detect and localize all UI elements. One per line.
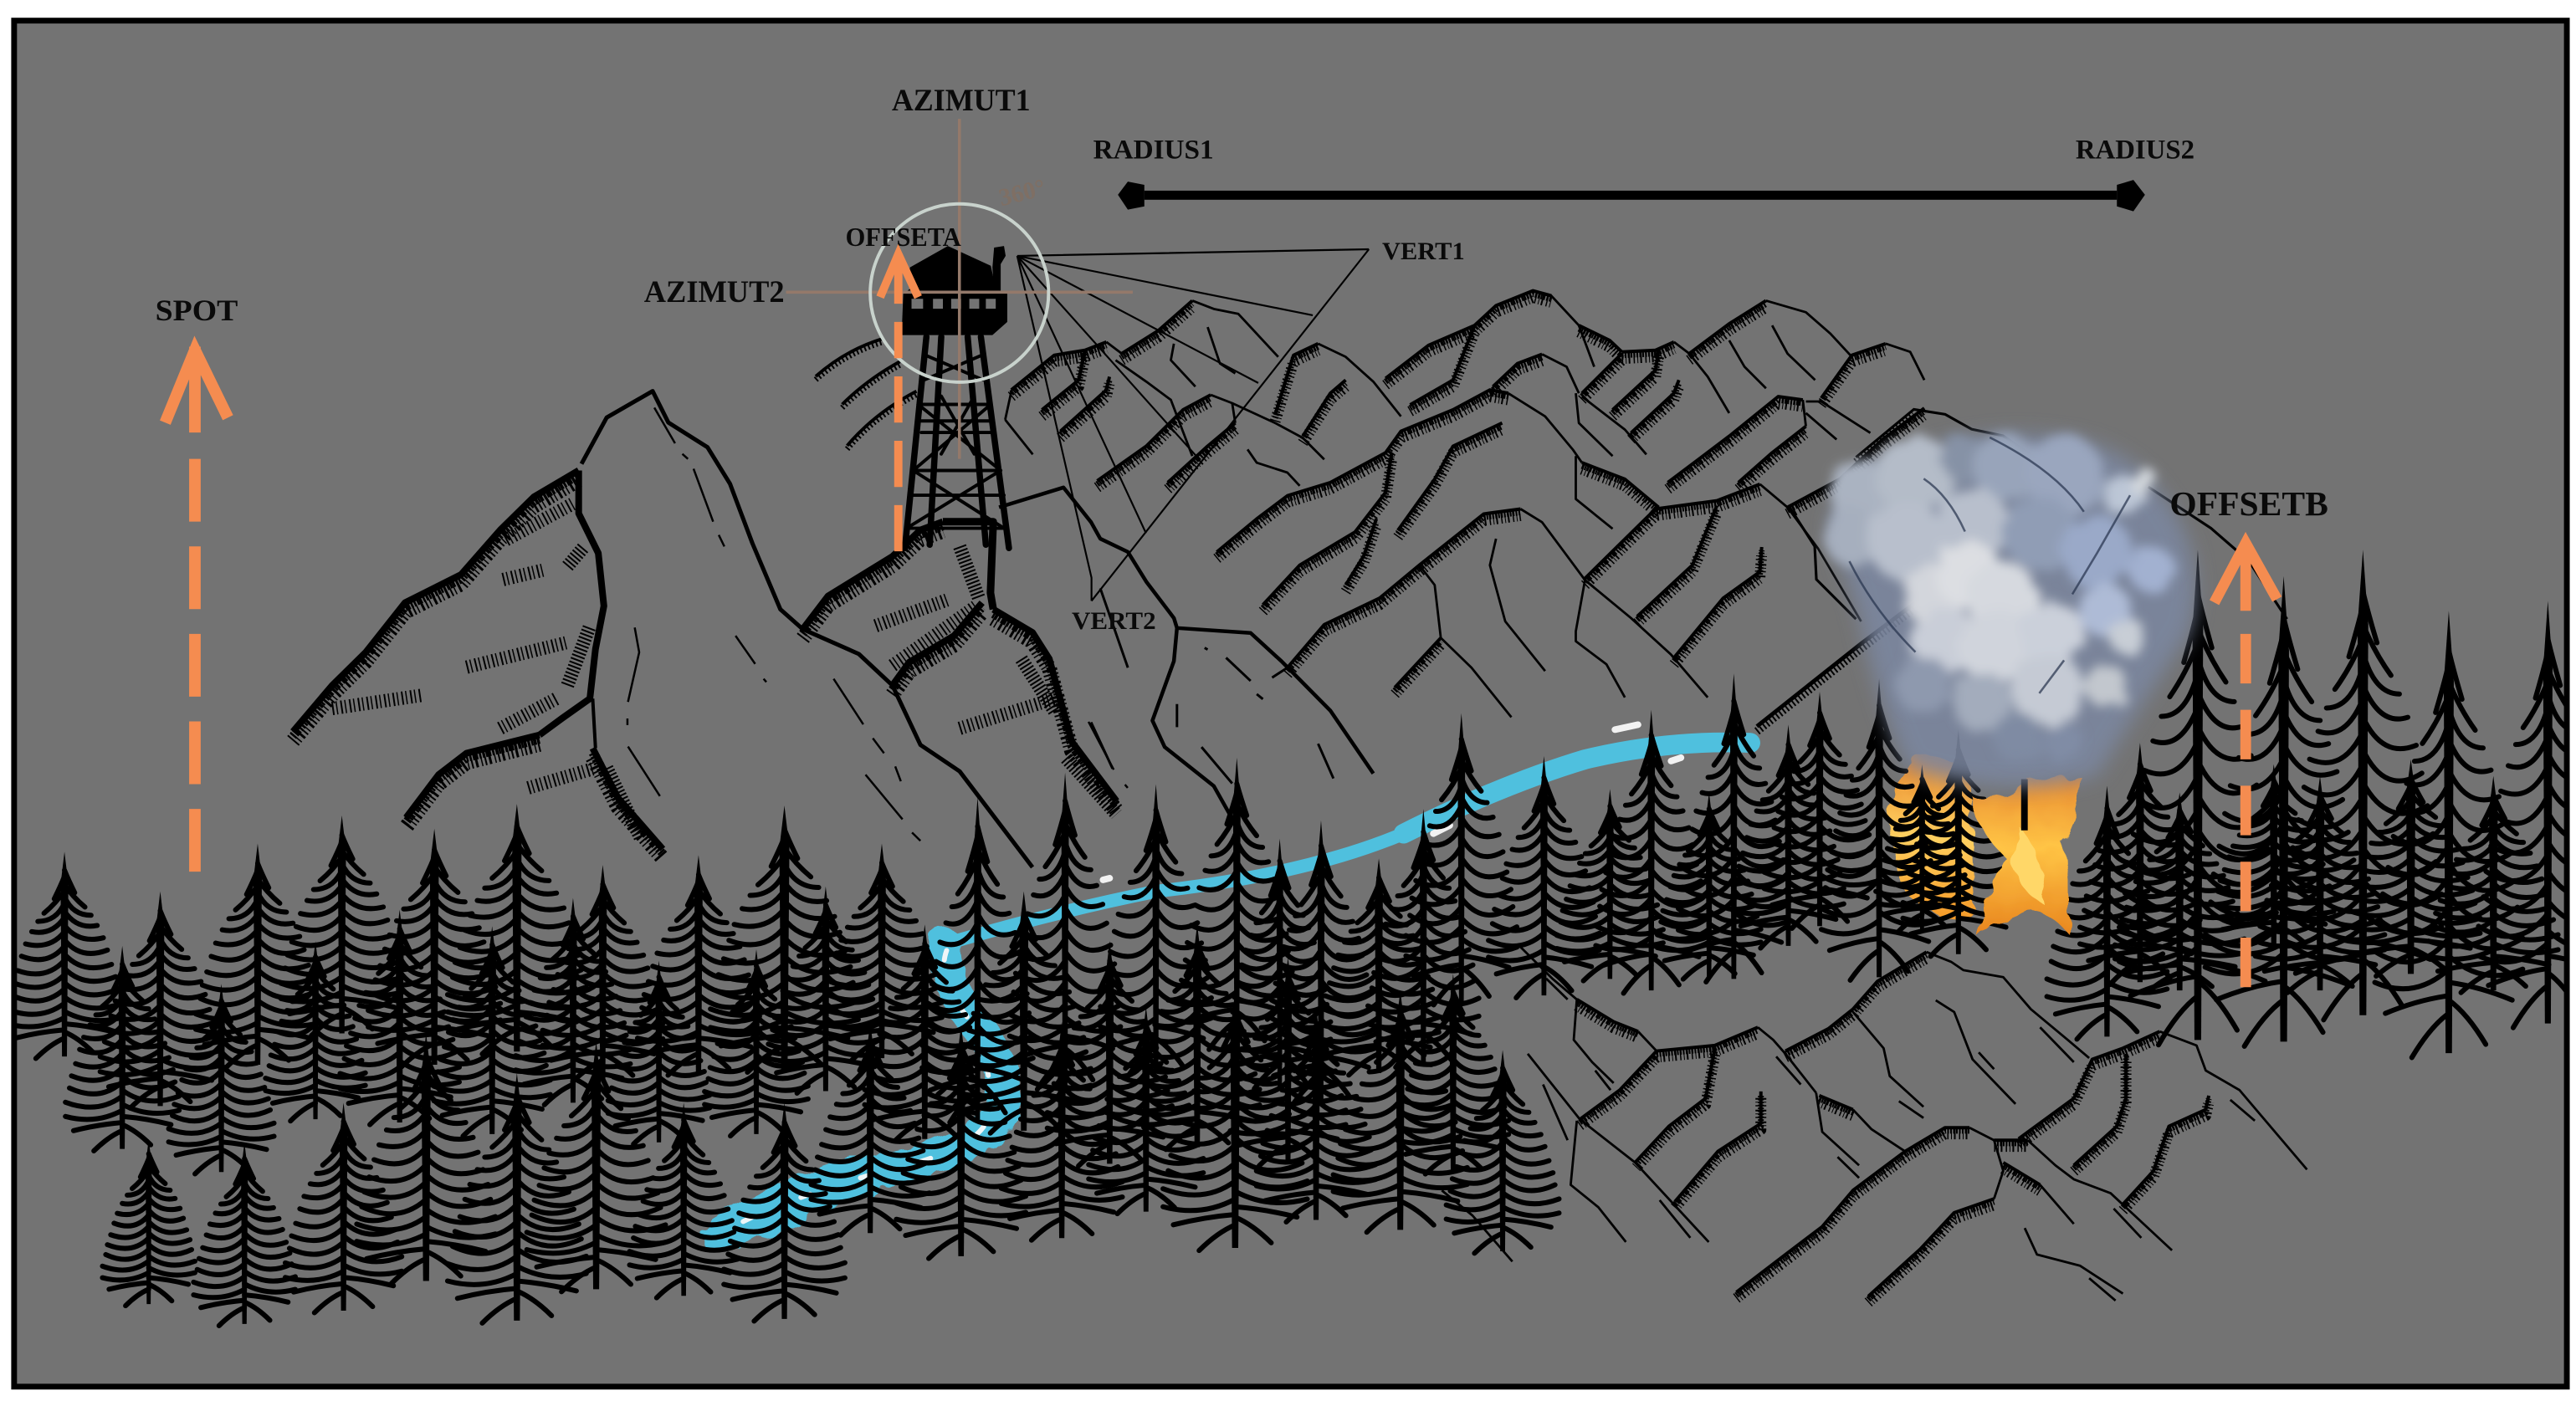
trees: right forest [1821, 550, 2576, 1057]
lookout person [992, 246, 1006, 294]
mountain: ridge behind tower peak [999, 488, 1373, 830]
label: RADIUS1: RADIUS1 [1093, 135, 1214, 165]
cab windows [912, 299, 996, 309]
burning tree stub [2023, 780, 2026, 831]
mountains: back range [1005, 291, 1924, 718]
range circle [870, 204, 1048, 382]
sight lines fan from tower [1017, 249, 1369, 601]
arrow: OFFSETA [880, 254, 918, 551]
flame: left, behind trees [1889, 757, 1975, 918]
mountain: big left peak and tower peak [293, 391, 1128, 867]
ridges left of tower [816, 339, 916, 449]
angle note: 360 degrees: 360° [996, 175, 1048, 212]
label: AZIMUT1: AZIMUT1 [892, 83, 1031, 117]
arrow: OFFSETB [2215, 543, 2277, 987]
trees: front row [102, 990, 1559, 1326]
ridge lines seen through the smoke [1850, 437, 2130, 693]
river [724, 724, 1750, 1235]
label: VERT2: VERT2 [1072, 608, 1156, 635]
label: AZIMUT2: AZIMUT2 [644, 274, 785, 309]
tower cab [902, 246, 1007, 335]
azimuth crosshair [786, 119, 1133, 459]
label: RADIUS2: RADIUS2 [2076, 135, 2194, 165]
trees: left middle row [65, 858, 1508, 1174]
tower [902, 246, 1009, 548]
smoke plume [1823, 434, 2196, 786]
radius bar [1118, 180, 2145, 212]
arrow: SPOT [165, 346, 228, 872]
thin lower right contour lines [1442, 945, 2307, 1301]
flame: right, in front of trees [1969, 776, 2081, 934]
label: OFFSETA: OFFSETA [846, 222, 961, 252]
ridges behind and right of the smoke [1757, 409, 2287, 731]
label: VERT1: VERT1 [1382, 238, 1465, 265]
forest: tree layers [8, 550, 2576, 1326]
label: OFFSETB: OFFSETB [2169, 484, 2328, 523]
mountains: lower right range [1442, 945, 2307, 1302]
trees: left back row [8, 673, 1875, 1122]
smoke puffs [1823, 434, 2174, 763]
outlines and shading of the peaks [332, 391, 1128, 867]
label: SPOT: SPOT [156, 294, 238, 327]
tower legs and bracing [905, 337, 1009, 548]
